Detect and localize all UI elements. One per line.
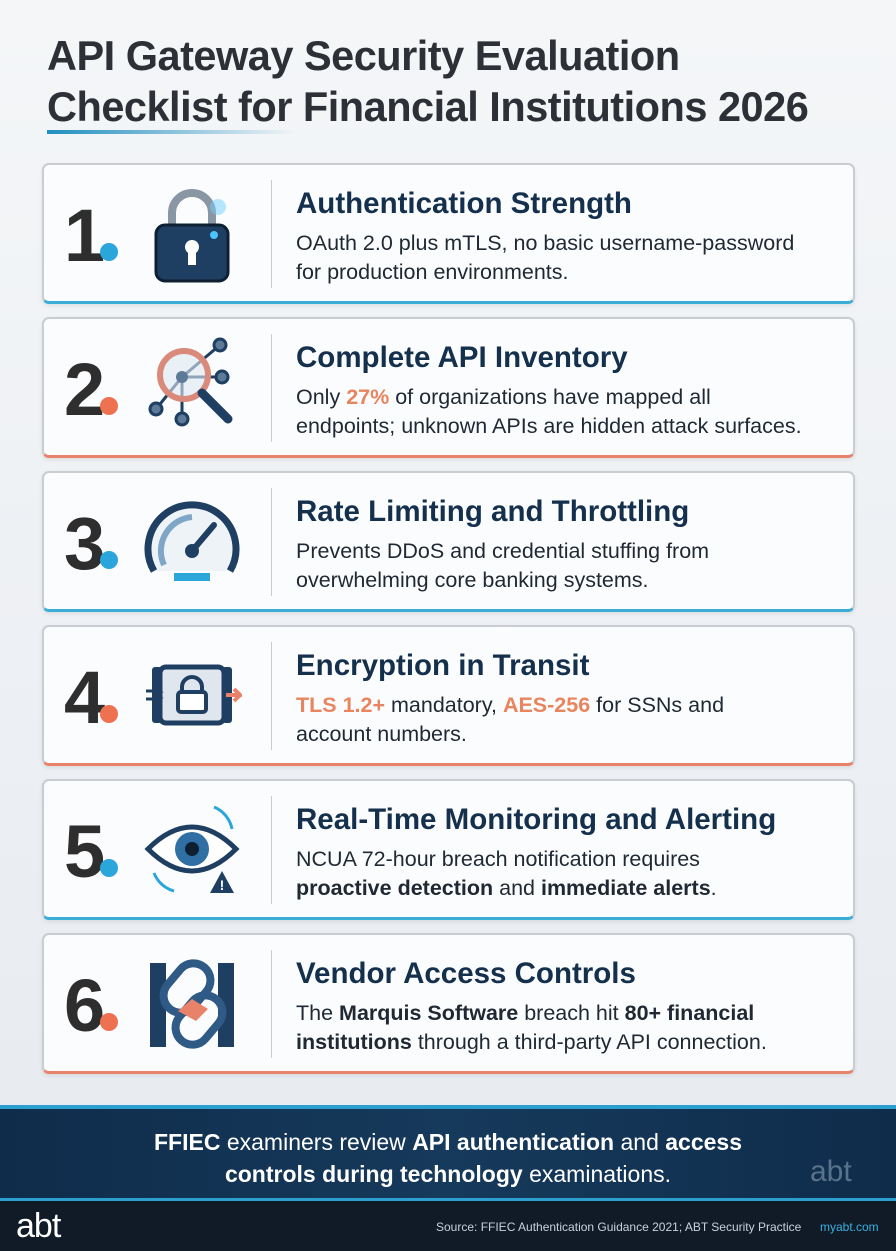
panel: card 4 (42, 625, 855, 766)
logo: abt (16, 1207, 60, 1245)
heading: Complete API Inventory (296, 341, 628, 374)
text (296, 693, 724, 746)
number 1: 1 (64, 194, 102, 277)
text: endpoints; unknown APIs are hidden attack surfaces. (296, 414, 802, 438)
number 4: 4 (64, 656, 102, 739)
icon: magnifier network (148, 338, 232, 426)
callout banner (0, 1105, 896, 1201)
callout banner: FFIEC examiners review API authentication and access (154, 1129, 742, 1155)
text: overwhelming core banking systems. (296, 568, 649, 592)
heading: Rate Limiting and Throttling (296, 495, 689, 528)
icon: chain handshake (150, 959, 234, 1049)
icon: eye with warning: ! (220, 877, 224, 893)
panel: card 2 (42, 317, 855, 458)
number 5: 5 (64, 810, 102, 893)
text: Only 27% of organizations have mapped all (296, 385, 711, 409)
text: The Marquis Software breach hit 80+ financial (296, 1001, 754, 1025)
text: institutions through a third-party API connection. (296, 1030, 767, 1054)
logo watermark: abt (810, 1155, 852, 1188)
heading: Vendor Access Controls (296, 957, 636, 990)
heading: Encryption in Transit (296, 649, 589, 682)
source text: Source: FFIEC Authentication Guidance 2021; ABT Security Practice (436, 1220, 801, 1234)
url: myabt.com (820, 1220, 879, 1234)
heading: Authentication Strength (296, 187, 632, 220)
footer (0, 1201, 896, 1251)
text (296, 847, 717, 900)
panel: card 5 (42, 779, 855, 920)
title: API Gateway Security Evaluation (47, 32, 680, 79)
callout banner: controls during technology examinations. (225, 1161, 671, 1187)
text: NCUA 72-hour breach notification requires (296, 847, 700, 871)
number 3: 3 (64, 502, 102, 585)
panel: card 6 (42, 933, 855, 1074)
text (296, 1001, 767, 1054)
text: TLS 1.2+ mandatory, AES-256 for SSNs and (296, 693, 724, 717)
text: for production environments. (296, 260, 568, 284)
text (296, 385, 802, 438)
text: OAuth 2.0 plus mTLS, no basic username-password (296, 231, 794, 255)
title (47, 32, 808, 130)
text (296, 231, 794, 284)
text (296, 539, 709, 592)
number 2: 2 (64, 348, 102, 431)
icon: speedometer (144, 501, 240, 581)
text: proactive detection and immediate alerts. (296, 876, 717, 900)
icon: eye with warning (144, 806, 240, 893)
text: Prevents DDoS and credential stuffing from (296, 539, 709, 563)
panel: card 3 (42, 471, 855, 612)
number 6: 6 (64, 964, 102, 1047)
panel: card 1 (42, 163, 855, 304)
icon: encrypted tunnel (146, 664, 242, 726)
text: account numbers. (296, 722, 467, 746)
title: Checklist for Financial Institutions 2026 (47, 83, 808, 130)
icon: padlock (154, 189, 230, 282)
heading: Real-Time Monitoring and Alerting (296, 803, 776, 836)
